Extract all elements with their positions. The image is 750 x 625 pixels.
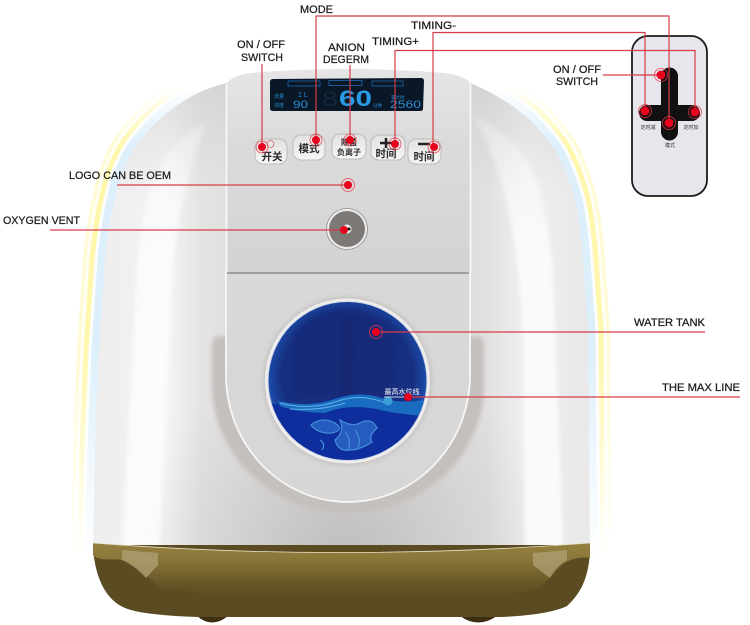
display screen: 90: [293, 99, 308, 111]
label: oxygen vent: OXYGEN VENT: [3, 215, 80, 227]
button: anion: [332, 134, 366, 159]
remote control: 模式: [665, 142, 675, 149]
label: remote on off switch: SWITCH: [556, 76, 598, 88]
callout dots: [256, 68, 702, 401]
display screen: 累计时: [391, 94, 405, 101]
button: timing minus: 时间: [414, 150, 434, 163]
label: anion degerm: ANION: [328, 42, 365, 54]
base shell: [93, 545, 590, 617]
shell left highlight: [122, 122, 207, 548]
button: timing plus: 时间: [376, 147, 396, 160]
base right highlight: [533, 550, 567, 578]
remote control: 定时减: [640, 124, 656, 131]
base: [93, 543, 590, 622]
label: anion degerm: [323, 42, 369, 66]
button: on off: 开关: [262, 150, 283, 163]
grip groove: [212, 336, 484, 513]
label: max line: THE MAX LINE: [662, 382, 740, 394]
lower water: [272, 394, 424, 460]
button: mode: 模式: [298, 142, 320, 155]
label: on off switch: [237, 39, 285, 64]
display screen: 60: [339, 86, 372, 111]
label: remote on off switch: [553, 64, 601, 88]
button: on off: [255, 139, 287, 164]
display screen: 2560: [390, 99, 421, 111]
upper panel edges: [226, 84, 470, 272]
oxygen vent: [326, 208, 368, 250]
label: anion degerm: DEGERM: [323, 54, 369, 66]
display screen: 1 L: [298, 92, 308, 99]
display screen: [270, 78, 424, 111]
button: timing minus: [408, 139, 441, 164]
base left highlight: [122, 550, 158, 578]
shell shading: [138, 83, 546, 545]
device body: [90, 69, 595, 560]
water tank window: [262, 296, 435, 466]
button: mode: [293, 135, 325, 160]
feet: [197, 616, 497, 622]
water tank window: 最高水位线: [384, 387, 420, 396]
display screen: 流量: [274, 93, 284, 100]
remote control: 定时加: [683, 124, 699, 131]
display screen: 8: [322, 88, 338, 111]
label: remote on off switch: ON / OFF: [553, 64, 601, 76]
glow lines around the unit: [93, 83, 590, 560]
remote keypad: [639, 68, 700, 140]
shell right highlight: [473, 117, 563, 548]
label: water tank: WATER TANK: [634, 317, 706, 329]
callout lines: [50, 16, 740, 397]
label: logo: LOGO CAN BE OEM: [69, 170, 171, 182]
panel seam: [227, 272, 469, 274]
base front gradient: [93, 543, 590, 598]
label: mode: MODE: [300, 4, 333, 16]
button: anion: 除菌: [341, 137, 357, 147]
label: on off switch: ON / OFF: [237, 39, 285, 51]
lower front panel: [226, 273, 470, 502]
display screen: 分钟: [373, 102, 382, 109]
bubbles: [311, 420, 377, 450]
label: timing minus: TIMING-: [411, 20, 456, 32]
label: on off switch: SWITCH: [241, 52, 283, 64]
white shell: [93, 83, 590, 560]
button: timing plus: [371, 135, 405, 160]
upper control panel: [227, 69, 470, 272]
label: timing plus: TIMING+: [372, 36, 419, 48]
display screen: 浓度: [274, 102, 284, 109]
remote control: [632, 36, 707, 196]
base top rim: [93, 543, 590, 552]
water surface: [278, 394, 428, 416]
button: anion: 负离子: [337, 147, 361, 157]
